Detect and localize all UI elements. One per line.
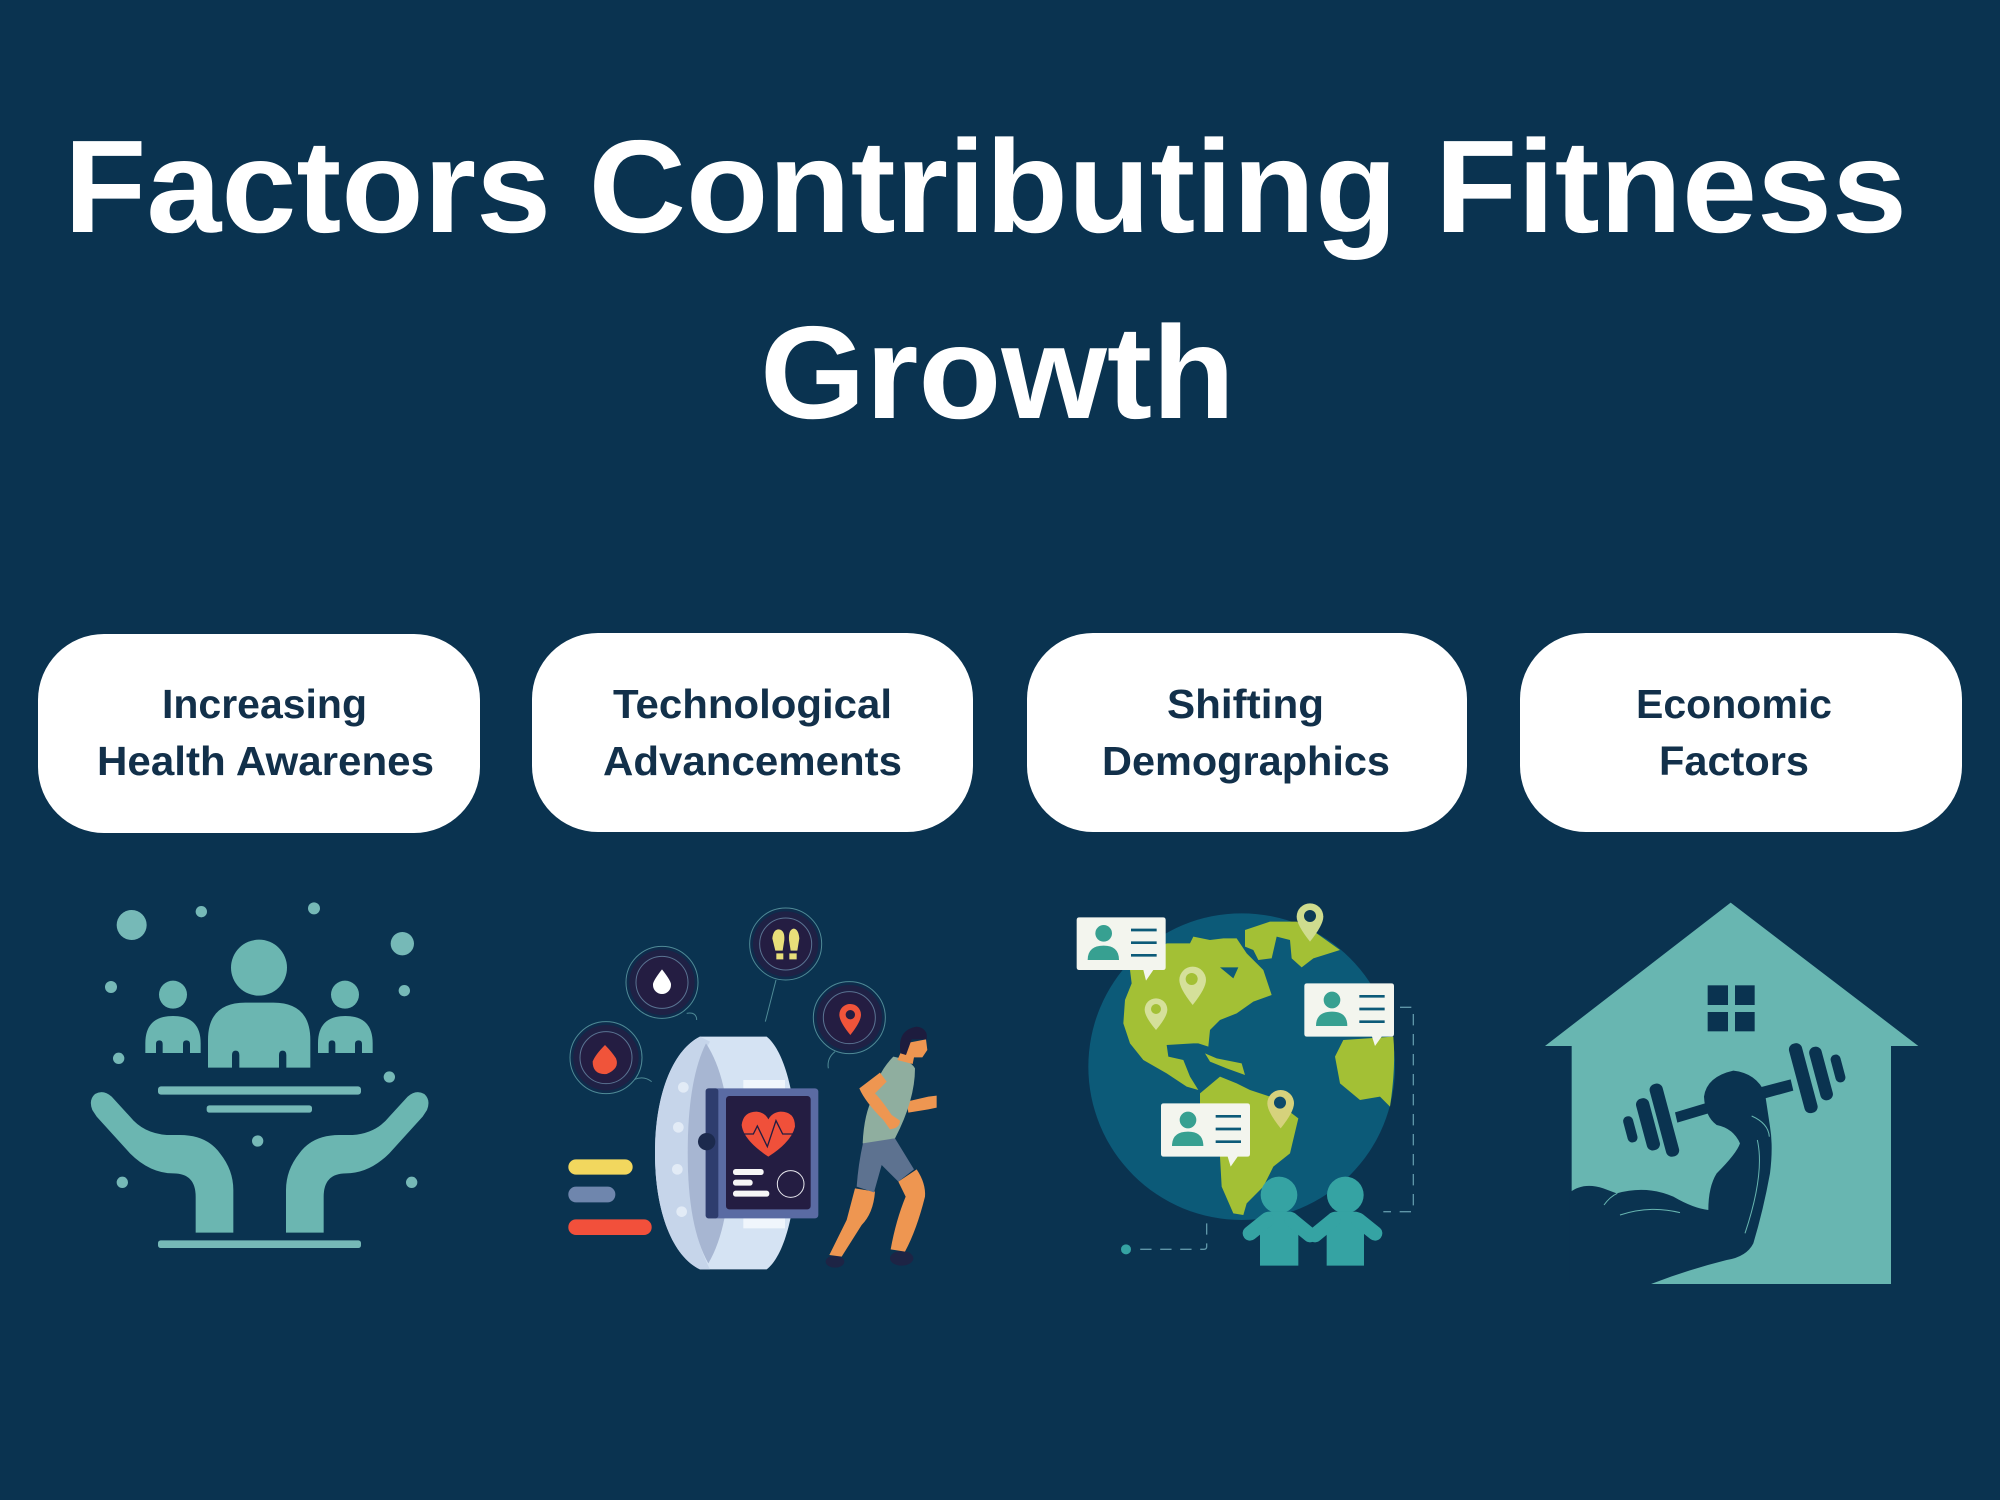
icon: wristband (655, 1037, 797, 1269)
icon: dashed connectors (1138, 1007, 1413, 1249)
icon: location pins (1145, 903, 1323, 1128)
callout: profile card right (1304, 983, 1394, 1046)
panel: economic factors (1520, 633, 1962, 832)
icon: metric bubbles (570, 908, 885, 1094)
icon: globe (1088, 913, 1395, 1220)
panel: increasing health awareness (38, 634, 480, 833)
title: Factors Contributing Fitness (64, 113, 1907, 260)
panel: shifting demographics (1027, 633, 1467, 832)
icon: stat bars (568, 1159, 652, 1235)
panel: increasing health awareness: Health Awarenes (97, 738, 434, 784)
panel: shifting demographics: Shifting (1167, 681, 1324, 727)
icon: flexed arm with dumbbell (1569, 1042, 1847, 1285)
title: Growth (760, 299, 1235, 446)
panel: technological advancements: Advancements (603, 738, 902, 784)
icon: runner (826, 1027, 937, 1268)
panel: increasing health awareness: Increasing (162, 681, 367, 727)
panel: economic factors: Economic (1636, 681, 1832, 727)
icon: hands holding people (91, 902, 428, 1248)
panel: technological advancements: Technological (613, 681, 892, 727)
icon: watch face with heart rate (698, 1088, 818, 1218)
icon: home gym house (1545, 903, 1918, 1285)
icon: fitness tracker and runner (568, 908, 937, 1269)
title (64, 113, 1907, 446)
panel: economic factors: Factors (1659, 738, 1809, 784)
icon: window (1708, 985, 1755, 1031)
icon: two people (1250, 1177, 1375, 1266)
panel: technological advancements (532, 633, 973, 832)
icon: globe with demographics (1077, 903, 1413, 1266)
callout: profile card top left (1077, 917, 1166, 981)
callout: profile card bottom (1161, 1103, 1250, 1167)
panel: shifting demographics: Demographics (1102, 738, 1390, 784)
